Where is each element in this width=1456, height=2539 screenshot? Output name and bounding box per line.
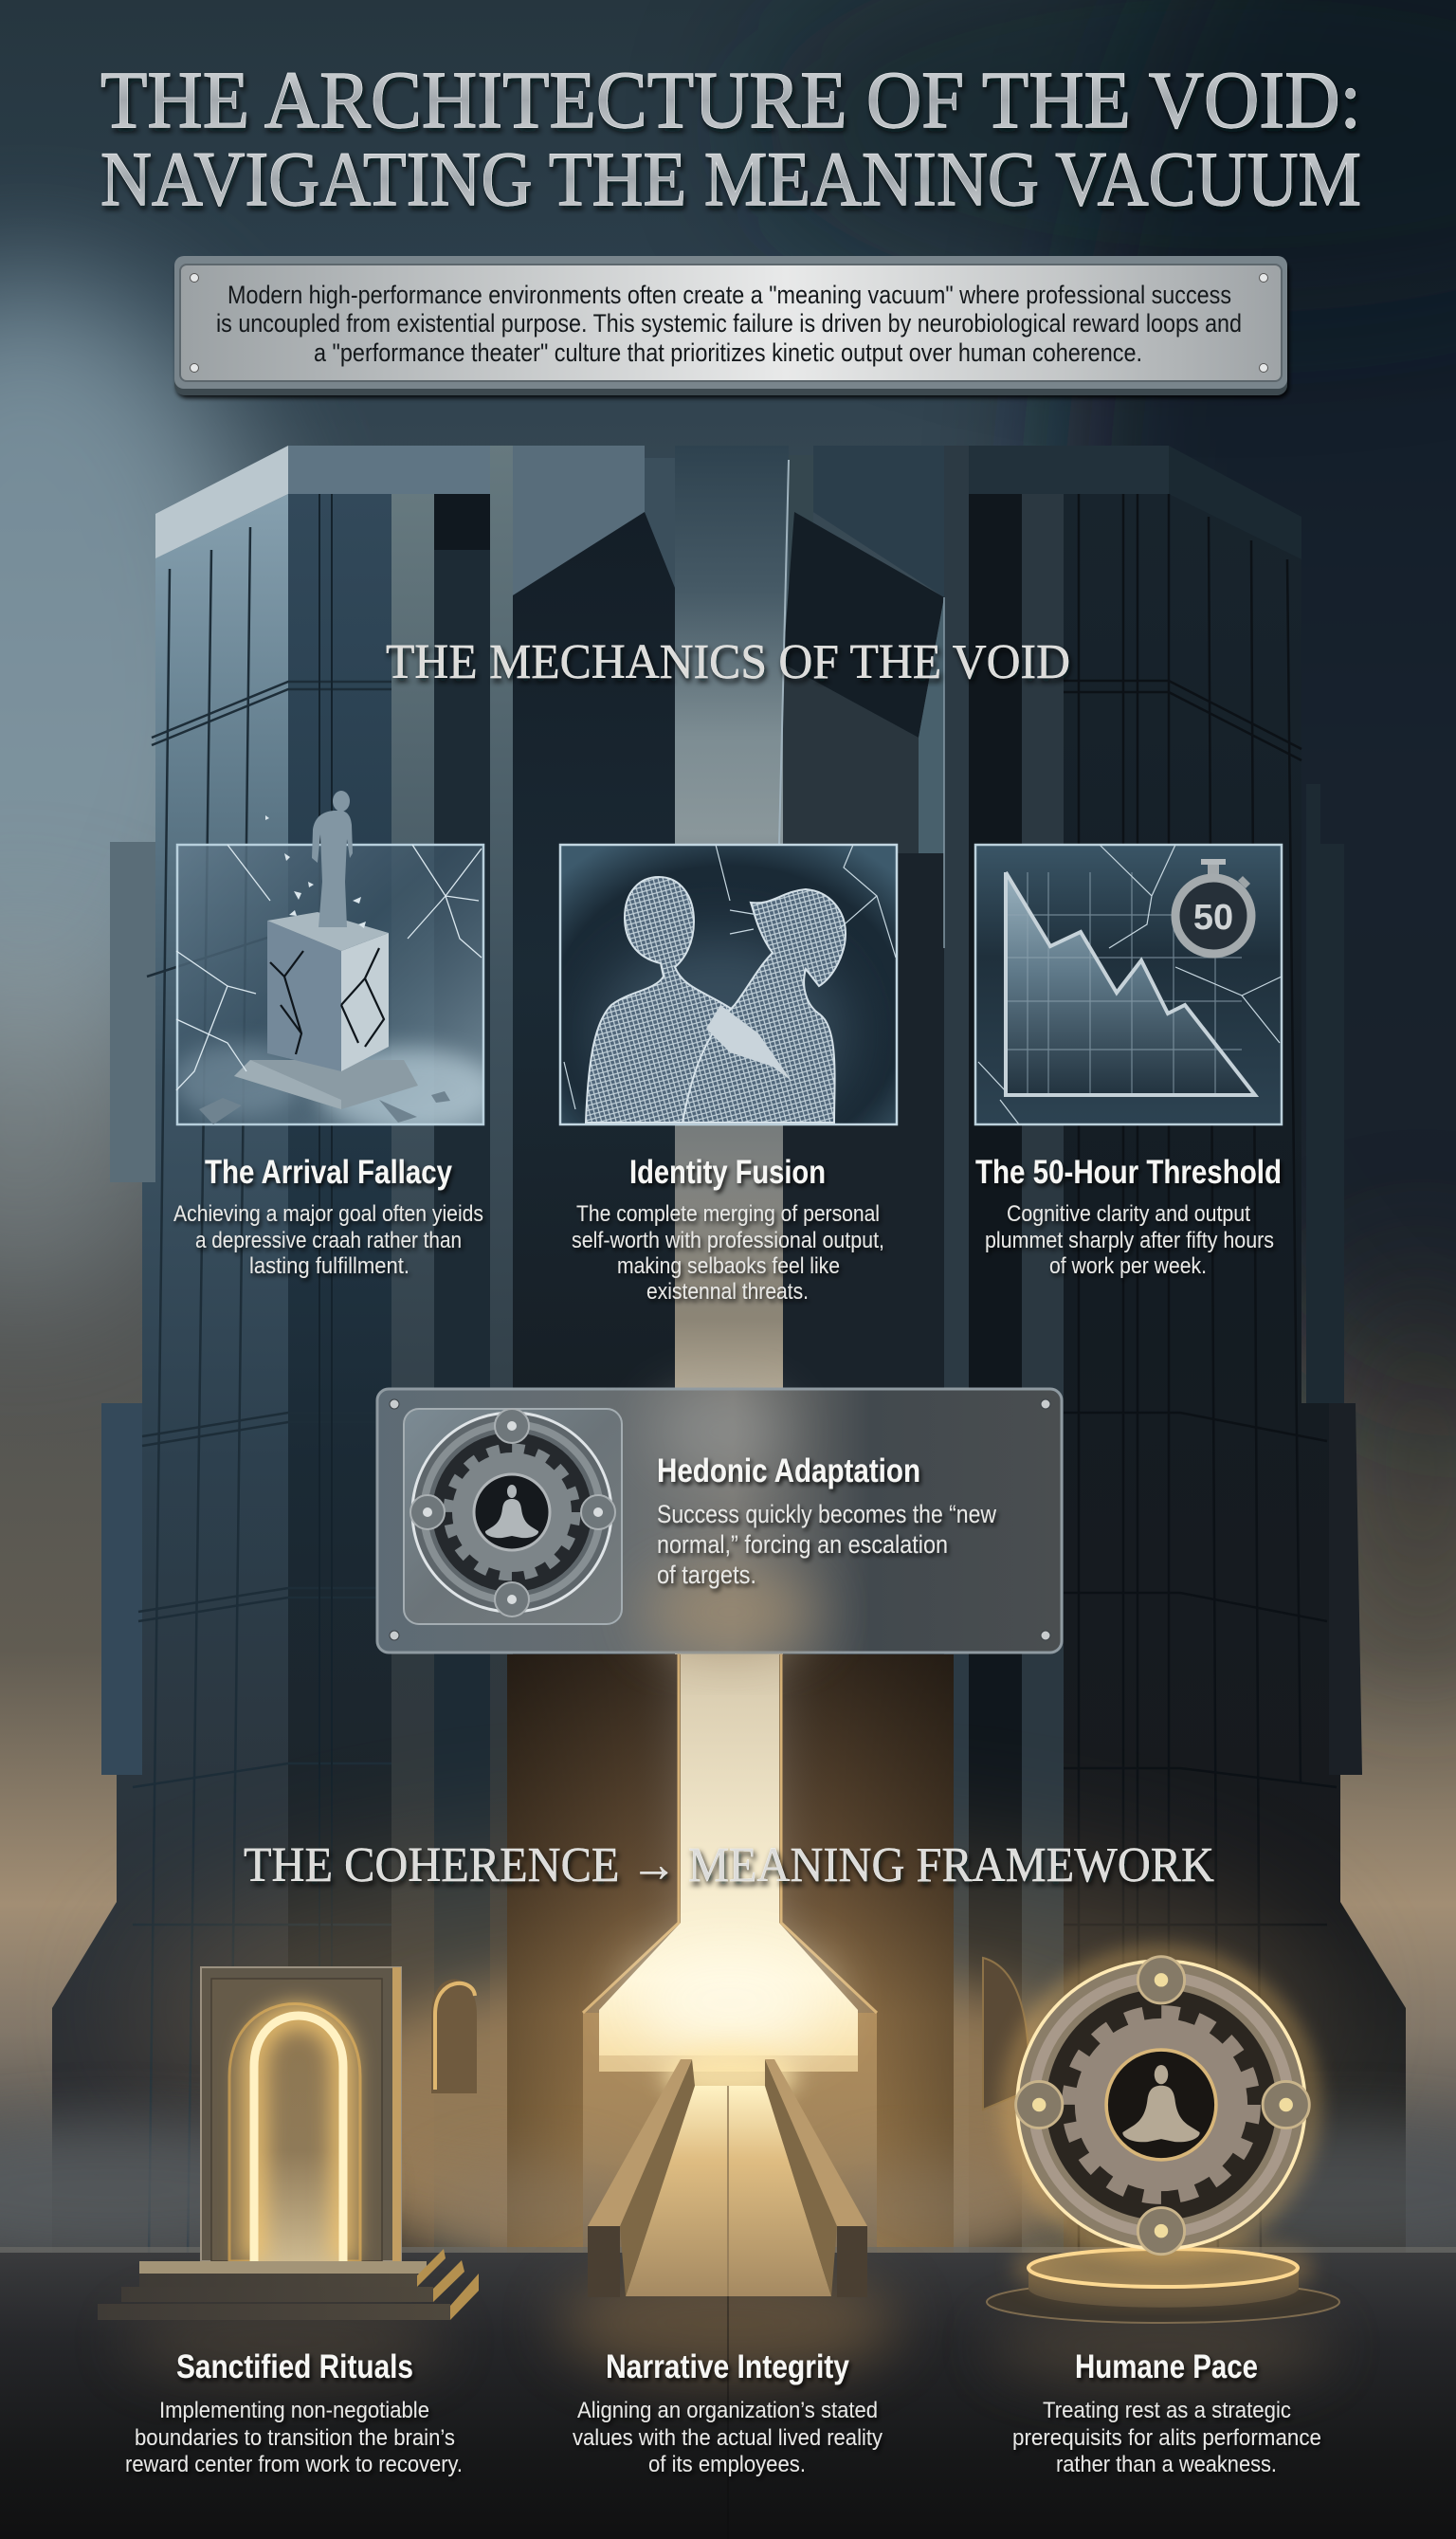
title: NAVIGATING THE MEANING VACUUM xyxy=(100,136,1361,222)
description: boundaries to transition the brain’s xyxy=(135,2425,455,2451)
description: Success quickly becomes the “new xyxy=(657,1500,996,1528)
panel: the 50-hour threshold xyxy=(975,845,1282,1279)
description: of its employees. xyxy=(648,2452,806,2477)
heading: Hedonic Adaptation xyxy=(657,1452,920,1489)
icon: shattered glass with statue on cracked plinth xyxy=(171,791,498,1133)
panel: identity fusion xyxy=(560,845,897,1305)
left face of tower xyxy=(52,494,288,2256)
panel: humane pace xyxy=(983,1957,1339,2477)
title: THE ARCHITECTURE OF THE VOID: xyxy=(100,54,1361,145)
icon: gear with meditating figure xyxy=(404,1409,622,1624)
bright edge xyxy=(779,460,789,844)
description: lasting fulfillment. xyxy=(249,1253,410,1279)
description: of work per week. xyxy=(1049,1253,1207,1279)
tower building xyxy=(52,446,1406,2256)
description: The complete merging of personal xyxy=(576,1201,880,1227)
description: reward center from work to recovery. xyxy=(125,2452,463,2477)
description: Cognitive clarity and output xyxy=(1007,1201,1250,1227)
heading: The 50-Hour Threshold xyxy=(975,1154,1282,1191)
description: existennal threats. xyxy=(646,1279,809,1305)
description xyxy=(173,1201,483,1279)
panel: sanctified rituals xyxy=(98,1967,479,2477)
heading: Identity Fusion xyxy=(629,1154,826,1191)
floor xyxy=(0,2250,1456,2539)
icon: falling line chart with stopwatch: 50 xyxy=(1193,898,1233,938)
lit lower core xyxy=(507,1653,954,2256)
icon: glowing pedestal xyxy=(987,2244,1339,2323)
panel: narrative integrity xyxy=(573,2059,883,2477)
description: values with the actual lived reality xyxy=(573,2425,883,2451)
panel: hedonic adaptation xyxy=(377,1389,1062,1653)
description: rather than a weakness. xyxy=(1056,2452,1277,2477)
heading: Sanctified Rituals xyxy=(176,2348,413,2385)
heading: mechanics of the void: THE MECHANICS OF THE VOID xyxy=(386,635,1070,689)
description: plummet sharply after fifty hours xyxy=(985,1228,1274,1253)
heading: coherence to meaning framework: THE COHERENCE → MEANING FRAMEWORK xyxy=(244,1838,1214,1892)
description: of targets. xyxy=(657,1561,756,1589)
icon: walkway bridge toward light xyxy=(588,2059,867,2297)
description xyxy=(573,2398,883,2477)
description xyxy=(657,1500,996,1589)
description xyxy=(572,1201,884,1305)
icon: glowing gear medallion xyxy=(1013,1957,1309,2255)
intro plaque: Modern high-performance environments often create a "meaning vacuum" where professional success xyxy=(228,281,1231,309)
mullions and bands xyxy=(133,527,391,2256)
description: normal,” forcing an escalation xyxy=(657,1530,948,1559)
description: making selbaoks feel like xyxy=(617,1253,840,1279)
icon: glowing doorway on steps xyxy=(98,1967,479,2320)
description xyxy=(125,2398,463,2477)
icon: small glowing side arch xyxy=(431,1980,477,2093)
description xyxy=(1012,2398,1321,2477)
fog at base xyxy=(0,2124,1456,2256)
description: Implementing non-negotiable xyxy=(159,2398,429,2423)
intro plaque: is uncoupled from existential purpose. This systemic failure is driven by neurobiological reward loops and xyxy=(216,309,1242,338)
description: Aligning an organization’s stated xyxy=(577,2398,878,2423)
description: a depressive craah rather than xyxy=(195,1228,462,1253)
heading: Humane Pace xyxy=(1075,2348,1258,2385)
warm light spill over lower tower xyxy=(140,1849,1316,2285)
description: self-worth with professional output, xyxy=(572,1228,884,1253)
icon: two merging mesh figures xyxy=(560,845,897,1128)
description: Achieving a major goal often yieids xyxy=(173,1201,483,1227)
intro plaque xyxy=(174,256,1287,395)
intro plaque: a "performance theater" culture that prioritizes kinetic output over human coherence. xyxy=(314,338,1142,367)
description: prerequisits for alits performance xyxy=(1012,2425,1321,2451)
panel: the arrival fallacy xyxy=(171,791,498,1279)
description xyxy=(985,1201,1274,1279)
description: Treating rest as a strategic xyxy=(1043,2398,1291,2423)
icon: falling line chart with stopwatch xyxy=(975,845,1282,1124)
heading: Narrative Integrity xyxy=(606,2348,849,2385)
icon: faint side emblem xyxy=(983,1958,1028,2110)
title xyxy=(100,54,1361,222)
heading: The Arrival Fallacy xyxy=(205,1154,452,1191)
